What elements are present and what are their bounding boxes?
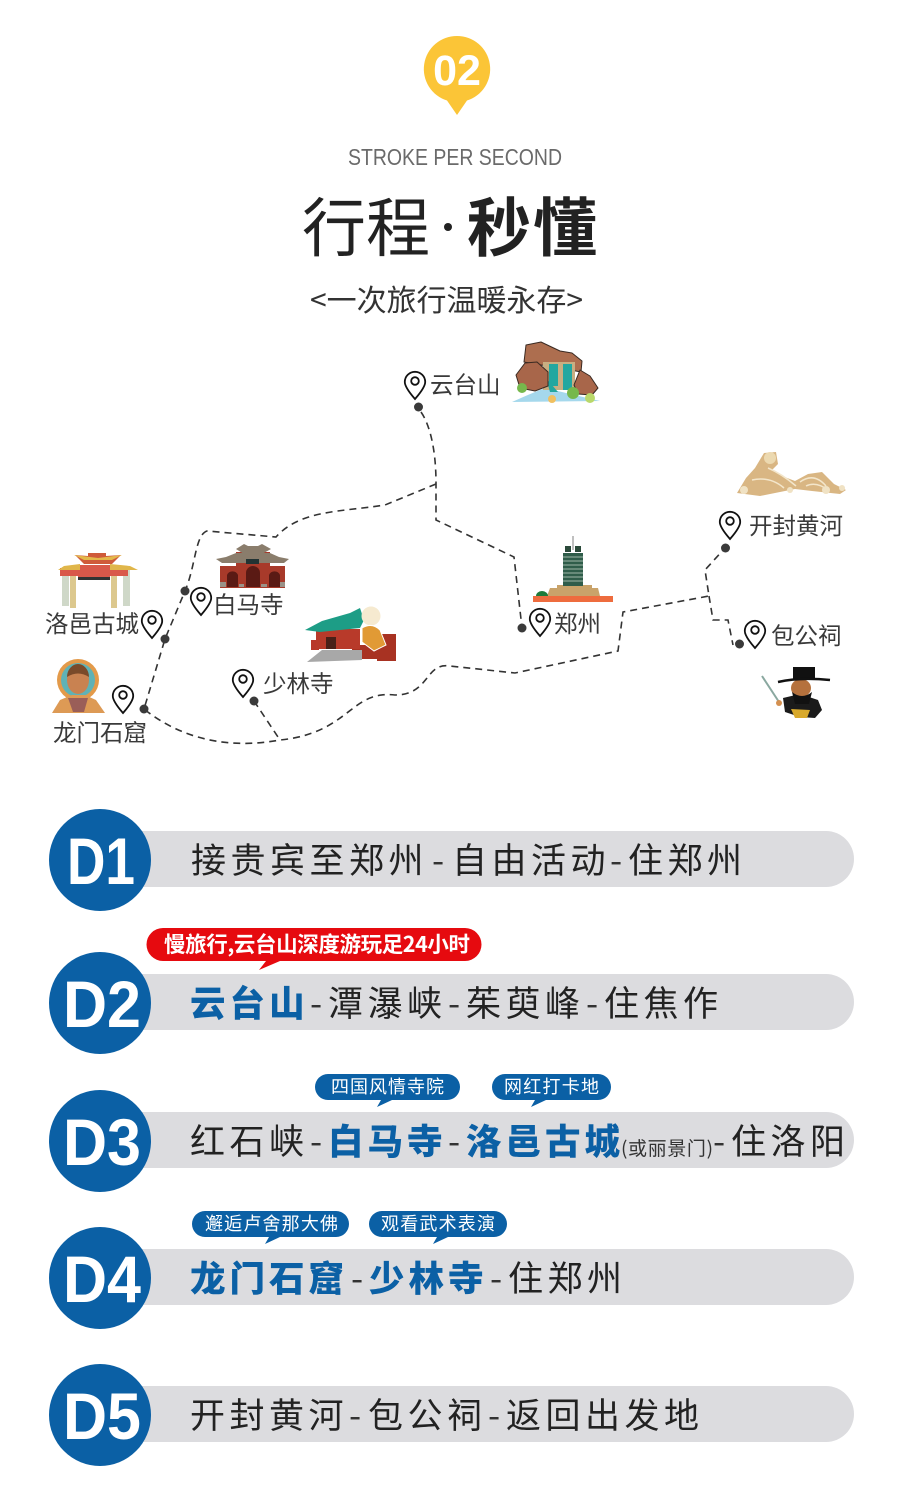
day 2 row: 潭瀑峡: [328, 976, 447, 1027]
day 5 row: D5: [63, 1379, 141, 1453]
callout: red: [146, 928, 482, 970]
icon: yellow river: [737, 452, 846, 496]
day 1 row: 住郑州: [628, 833, 747, 884]
day 4 row: 少林寺: [369, 1251, 488, 1302]
callout: temple: 四国风情寺院: [331, 1073, 444, 1099]
day 2 row: -: [586, 976, 598, 1027]
stops: [140, 402, 744, 714]
day 3 row: 白马寺: [328, 1114, 447, 1165]
day 5 row: -: [349, 1388, 361, 1439]
day 3 row: 红石峡: [190, 1114, 309, 1165]
day 4 row: -: [351, 1251, 363, 1302]
day 3 row: -: [448, 1114, 460, 1165]
day 1 row: -: [432, 833, 444, 884]
place labels: 少林寺: [263, 665, 334, 699]
callout: red: 慢旅行,云台山深度游玩足24小时: [164, 928, 470, 959]
callout: buddha: [192, 1210, 349, 1244]
place labels: 白马寺: [213, 586, 284, 620]
callout: hot spot: [492, 1073, 611, 1107]
icon: zhengzhou tower: [533, 536, 613, 602]
place labels: 云台山: [430, 366, 500, 400]
place labels: 郑州: [554, 605, 601, 639]
day 3 row: -: [713, 1114, 725, 1165]
icon: white horse temple: [216, 544, 289, 588]
callout: hot spot: 网红打卡地: [504, 1073, 599, 1099]
icon: yuntai mountain: [512, 342, 600, 403]
day 2 row: [49, 928, 854, 1054]
icon: luoyi gate: [58, 553, 138, 608]
day 4 row: [49, 1210, 854, 1329]
day 2 row: 云台山: [190, 976, 309, 1027]
day 1 row: [49, 809, 854, 911]
day 1 row: 接贵宾至郑州: [191, 833, 428, 884]
english subtitle: STROKE PER SECOND: [348, 144, 562, 170]
route map: [45, 342, 846, 748]
title: [302, 178, 597, 270]
dashed routes: [144, 412, 733, 743]
day 5 row: [49, 1364, 854, 1466]
day 3 row: 洛邑古城: [466, 1114, 624, 1165]
icon: buddha: [52, 659, 105, 713]
callout: martial arts: 观看武术表演: [381, 1210, 495, 1236]
callout: martial arts: [369, 1210, 507, 1244]
day 2 row: D2: [63, 967, 141, 1041]
day 1 row: D1: [67, 824, 135, 898]
place labels: 洛邑古城: [45, 605, 139, 639]
day 5 row: 返回出发地: [506, 1388, 704, 1439]
day 2 row: -: [310, 976, 322, 1027]
badge: 02: [424, 36, 490, 115]
title: 行程: [302, 178, 430, 270]
day 3 row: -: [310, 1114, 322, 1165]
place labels: 包公祠: [771, 617, 842, 651]
day 3 row: D3: [63, 1105, 141, 1179]
place labels: 龙门石窟: [53, 714, 147, 748]
day 4 row: 龙门石窟: [190, 1251, 348, 1302]
callout: temple: [315, 1073, 460, 1107]
day 2 row: -: [448, 976, 460, 1027]
day 3 row: [49, 1073, 854, 1192]
icon: shaolin temple with monk: [305, 606, 396, 662]
place labels: [45, 366, 843, 748]
day 1 row: -: [610, 833, 622, 884]
title: 秒懂: [467, 178, 597, 270]
day 5 row: 开封黄河: [190, 1388, 348, 1439]
day 2 row: 住焦作: [604, 976, 723, 1027]
day 3 row: 住洛阳: [731, 1114, 850, 1165]
day 3 row: (或丽景门): [621, 1134, 713, 1161]
day 2 row: 茱萸峰: [466, 976, 585, 1027]
subtitle: <一次旅行温暖永存>: [310, 276, 583, 320]
day 4 row: D4: [63, 1242, 141, 1316]
pins: [113, 372, 765, 713]
day 4 row: -: [490, 1251, 502, 1302]
badge: 02: 02: [433, 47, 481, 95]
callout: buddha: 邂逅卢舍那大佛: [205, 1210, 338, 1236]
place labels: 开封黄河: [749, 507, 843, 541]
day 5 row: -: [488, 1388, 500, 1439]
day 5 row: 包公祠: [368, 1388, 487, 1439]
day 1 row: 自由活动: [452, 833, 610, 884]
icon: bao gong: [762, 667, 830, 718]
day 4 row: 住郑州: [508, 1251, 627, 1302]
